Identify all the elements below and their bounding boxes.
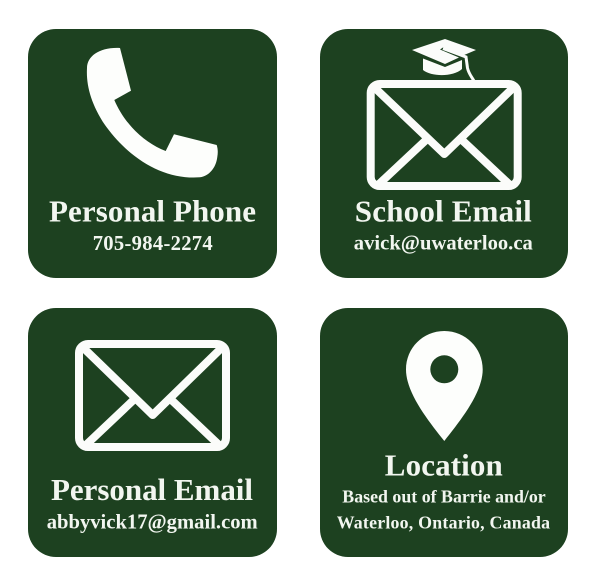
icon: envelope [371,84,518,186]
heading: School Email: School Email [355,194,532,229]
icon: phone handset [87,48,218,178]
heading: Location: Location [385,448,503,483]
panel: personal email [28,308,277,557]
text: personal email address: abbyvick17@gmail.com [47,511,258,533]
icon: envelope [79,344,226,447]
text: location description [337,486,550,532]
heading: Personal Email: Personal Email [51,472,253,507]
icon: envelope with graduation cap [371,39,518,186]
panel: school email [320,29,568,278]
text: location description: Based out of Barrie and/or [342,486,546,506]
text: school email address: avick@uwaterloo.ca [354,232,533,254]
panel: personal phone [28,29,277,278]
icon: graduation cap [412,39,476,81]
icon: map pin [406,331,483,441]
heading: Personal Phone: Personal Phone [49,194,256,229]
text: location description: Waterloo, Ontario, Canada [337,512,550,532]
panel: location [320,308,568,557]
text: phone number: 705-984-2274 [93,233,213,255]
